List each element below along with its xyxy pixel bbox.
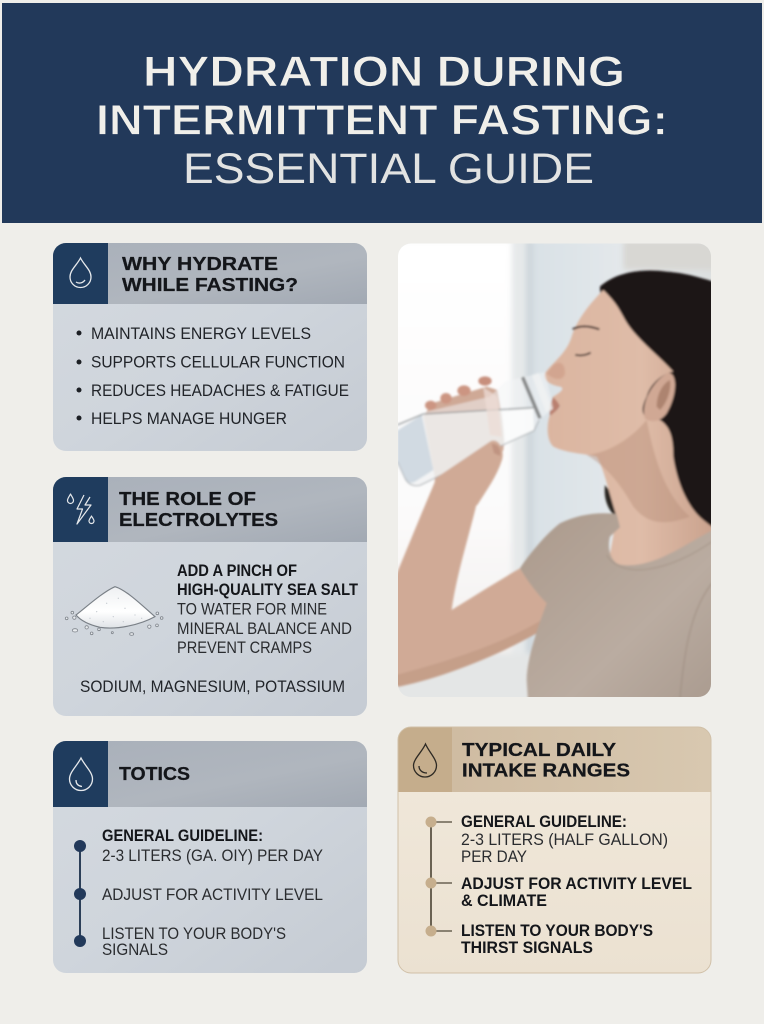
icon: electrolytes bolt and drops <box>68 494 94 524</box>
timeline text: SIGNALS <box>102 941 168 959</box>
timeline text <box>461 813 692 957</box>
timeline text: 2-3 LITERS (HALF GALLON) <box>461 831 668 849</box>
palm and thumb <box>433 441 503 513</box>
title: ESSENTIAL GUIDE <box>183 145 594 193</box>
timeline text: ADJUST FOR ACTIVITY LEVEL <box>461 875 692 893</box>
heading <box>122 253 298 295</box>
heading: WHY HYDRATE <box>122 253 278 274</box>
heading: TOTICS <box>119 763 190 784</box>
title: INTERMITTENT FASTING: <box>96 96 668 144</box>
timeline text: LISTEN TO YOUR BODY'S <box>102 925 286 943</box>
eye and brow <box>575 353 591 355</box>
electrolyte tip text: TO WATER FOR MINE <box>177 600 327 618</box>
electrolyte tip text: MINERAL BALANCE AND <box>177 620 352 638</box>
timeline <box>426 816 452 936</box>
arm <box>390 482 548 688</box>
bullet list: MAINTAINS ENERGY LEVELS <box>91 324 311 343</box>
shirt <box>520 513 720 707</box>
timeline text: GENERAL GUIDELINE: <box>102 827 263 845</box>
bullet list: REDUCES HEADACHES & FATIGUE <box>91 381 349 400</box>
fingertips <box>478 376 492 386</box>
heading: INTAKE RANGES <box>462 760 630 780</box>
hand behind bottle <box>424 386 505 477</box>
timeline text: & CLIMATE <box>461 892 547 910</box>
ear <box>644 373 675 421</box>
water <box>423 410 504 478</box>
heading <box>462 739 630 780</box>
icon: water drop <box>70 758 92 790</box>
icon: sea salt pile <box>65 587 163 635</box>
timeline text: THIRST SIGNALS <box>461 939 593 957</box>
photo: woman drinking water from bottle <box>390 240 720 707</box>
header banner <box>2 3 762 223</box>
timeline text: LISTEN TO YOUR BODY'S <box>461 922 653 940</box>
electrolyte tip text: PREVENT CRAMPS <box>177 639 312 657</box>
electrolyte tip text <box>177 562 358 657</box>
bullet list: HELPS MANAGE HUNGER <box>91 409 287 428</box>
heading: TYPICAL DAILY <box>462 739 617 760</box>
hair <box>600 270 720 533</box>
electrolyte tip text: HIGH-QUALITY SEA SALT <box>177 581 358 599</box>
electrolyte tip text: ADD A PINCH OF <box>177 562 297 580</box>
icon: water drop <box>70 258 91 288</box>
panel: totics <box>53 741 367 973</box>
bottle cap ring <box>523 377 540 418</box>
timeline text: 2-3 LITERS (GA. OIY) PER DAY <box>102 847 323 865</box>
panel: why hydrate while fasting <box>53 243 367 451</box>
icon: water drop <box>414 744 436 777</box>
bullet list: SUPPORTS CELLULAR FUNCTION <box>91 352 345 372</box>
timeline text: ADJUST FOR ACTIVITY LEVEL <box>102 886 323 904</box>
timeline text <box>102 827 323 959</box>
timeline text: PER DAY <box>461 848 527 866</box>
lips <box>550 397 560 416</box>
panel: typical daily intake ranges <box>398 727 711 973</box>
panel: the role of electrolytes <box>53 477 367 716</box>
face and neck <box>545 290 720 573</box>
heading <box>119 488 278 530</box>
minerals list: SODIUM, MAGNESIUM, POTASSIUM <box>80 677 345 696</box>
bottle glass <box>424 373 554 477</box>
heading: WHILE FASTING? <box>122 274 298 295</box>
bullet list <box>76 324 349 428</box>
heading: ELECTROLYTES <box>119 509 278 530</box>
title <box>96 48 668 193</box>
timeline <box>74 840 86 947</box>
heading: THE ROLE OF <box>119 488 256 509</box>
title: HYDRATION DURING <box>143 48 625 96</box>
timeline text: GENERAL GUIDELINE: <box>461 813 627 831</box>
